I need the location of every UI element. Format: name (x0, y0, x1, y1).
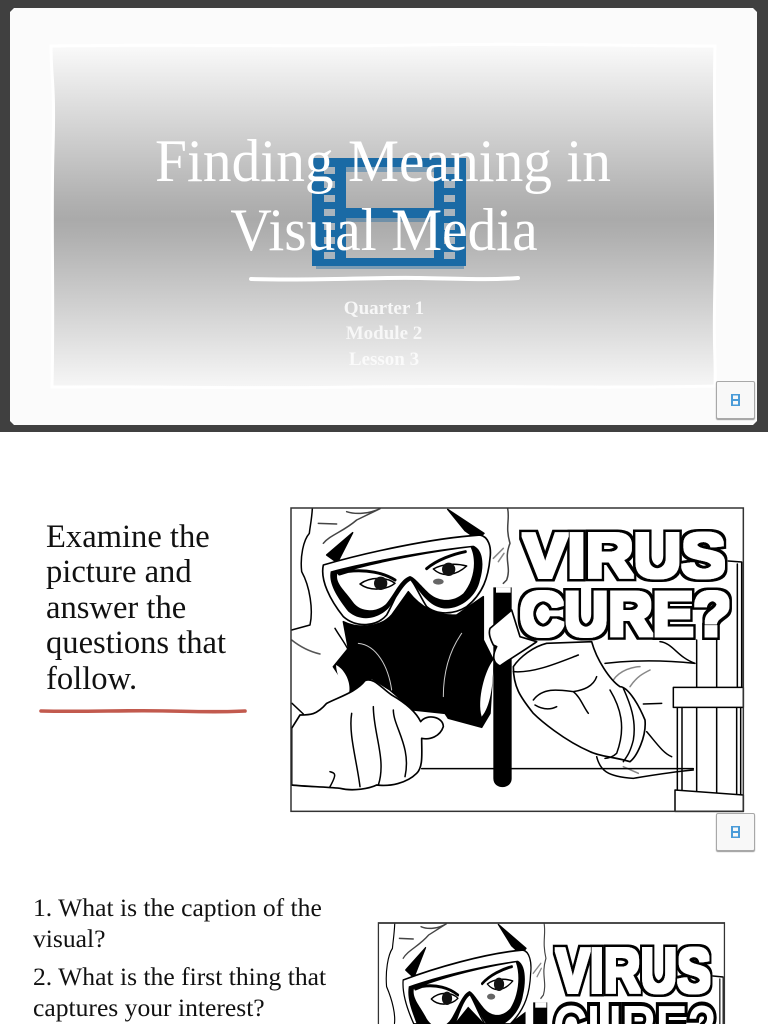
hood lines (292, 509, 312, 630)
icon: film strip (312, 158, 466, 269)
text block: instruction: questions that (46, 625, 226, 661)
caption: VIRUS CURE?: VIRUS (523, 522, 726, 591)
table (422, 766, 693, 771)
test tube (493, 587, 512, 787)
title: Finding Meaning in (155, 128, 611, 194)
text block: questions: visual? (33, 924, 106, 953)
caption: repeated VIRUS: VIRUS (555, 936, 711, 1005)
subtitle (344, 298, 424, 370)
icon: slide button 2 (716, 813, 755, 851)
text block: instruction: Examine the (46, 519, 210, 555)
caption: VIRUS CURE?: CURE? (520, 580, 731, 649)
left hand (292, 680, 443, 790)
respirator (333, 592, 493, 727)
panel: title slide (0, 0, 768, 432)
text block: instruction: picture and (46, 554, 192, 590)
subtitle: Lesson 3 (349, 349, 419, 370)
title underline (251, 278, 518, 280)
text block: questions: 1. What is the caption of the (33, 893, 322, 922)
red underline (39, 709, 247, 714)
text block: questions: captures your interest? (33, 993, 265, 1022)
right hand (513, 642, 645, 762)
subtitle: Module 2 (346, 323, 422, 344)
text block: instruction (46, 519, 226, 697)
rack (677, 561, 742, 795)
goggles (323, 535, 490, 625)
text block: instruction: answer the (46, 590, 186, 626)
title (155, 128, 611, 263)
text block: instruction: follow. (46, 661, 137, 697)
caption: VIRUS CURE? (520, 522, 731, 649)
text block: questions: 2. What is the first thing that (33, 962, 326, 991)
illustration: virus cure cartoon (290, 507, 744, 812)
subtitle: Quarter 1 (344, 298, 424, 319)
illustration: repeated virus cure cartoon, cut by page edge (378, 922, 726, 1024)
title: Visual Media (230, 197, 538, 263)
rack bar (673, 687, 743, 707)
sleeve (597, 642, 695, 778)
icon: slide button 1 (716, 381, 755, 419)
text block: questions (33, 893, 326, 1022)
